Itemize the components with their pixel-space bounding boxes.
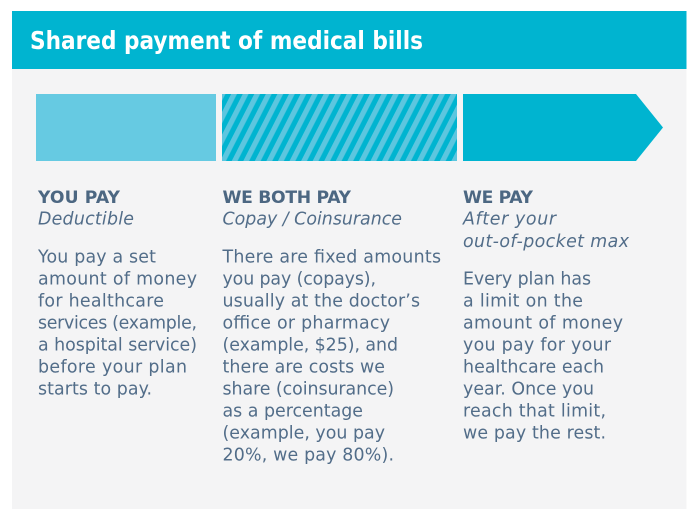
column: we both pay xyxy=(222,188,441,466)
text block: we both pay description: There are fixed amounts xyxy=(222,248,441,268)
text block: you pay description: amount of money xyxy=(38,270,197,290)
subheading: after your out-of-pocket max: After your xyxy=(462,210,558,230)
subheading: copay and coinsurance: Copay / Coinsurance xyxy=(222,210,402,230)
column: we pay xyxy=(462,188,630,444)
column: you pay xyxy=(37,188,197,400)
text block: we pay description: a limit on the xyxy=(463,292,583,312)
text block: we both pay description: you pay (copays), xyxy=(222,270,376,290)
text block: you pay description: a hospital service) xyxy=(38,336,197,356)
text block: we pay description: amount of money xyxy=(463,314,623,334)
text block: you pay description: You pay a set xyxy=(37,248,156,268)
text block: we both pay description: as a percentage xyxy=(222,402,363,422)
text block: we both pay description: (example, $25), and xyxy=(222,336,398,356)
text block: you pay description xyxy=(37,248,197,400)
heading: we pay: WE PAY xyxy=(463,188,534,208)
text block: you pay description: for healthcare xyxy=(38,292,164,312)
heading: we both pay: WE BOTH PAY xyxy=(222,188,352,208)
arrow: we pay segment xyxy=(463,94,663,161)
text block: we pay description: year. Once you xyxy=(463,380,594,400)
text block: you pay description: starts to pay. xyxy=(38,380,152,400)
text block: we both pay description: share (coinsurance) xyxy=(222,380,394,400)
text block: you pay description: before your plan xyxy=(38,358,187,378)
text block: we pay description: reach that limit, xyxy=(463,402,606,422)
text block: we both pay description: office or pharmacy xyxy=(222,314,390,334)
text block: we both pay description: (example, you pay xyxy=(222,424,385,444)
subheading: after your out-of-pocket max xyxy=(462,210,630,252)
text block: we pay description: you pay for your xyxy=(463,336,612,356)
heading: you pay: YOU PAY xyxy=(37,188,121,208)
text block: we pay description: we pay the rest. xyxy=(463,424,606,444)
text block: we pay description xyxy=(463,270,623,444)
subheading: after your out-of-pocket max: out-of-pocket max xyxy=(463,232,630,252)
text block: we both pay description: 20%, we pay 80%). xyxy=(222,446,394,466)
subheading: deductible: Deductible xyxy=(38,210,134,230)
text block: we pay description: healthcare each xyxy=(463,358,604,378)
bar: we both pay striped segment xyxy=(222,94,457,161)
text block: you pay description: services (example, xyxy=(38,314,197,334)
text block: we both pay description xyxy=(222,248,441,466)
text block: we both pay description: usually at the doctor’s xyxy=(222,292,420,312)
header banner xyxy=(12,11,686,69)
text block: we pay description: Every plan has xyxy=(463,270,591,290)
text block: we both pay description: there are costs we xyxy=(222,358,385,378)
bar: you pay segment xyxy=(36,94,216,161)
title: Shared payment of medical bills xyxy=(30,26,423,55)
